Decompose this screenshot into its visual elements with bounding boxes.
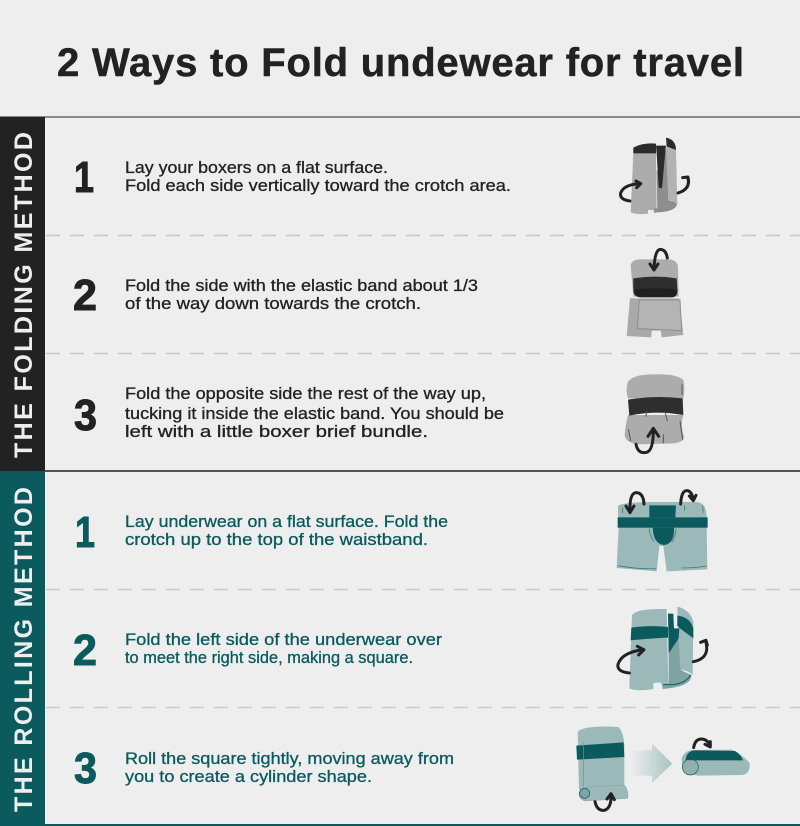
icon: rolling step 3 roll into a cylinder (576, 727, 750, 810)
folding step 2 text: of the way down towards the crotch. (125, 295, 421, 313)
rolling step 3 number: 3 (74, 744, 97, 793)
rolling step 1 text: crotch up to the top of the waistband. (125, 531, 428, 549)
folding step 3 text: left with a little boxer brief bundle. (125, 423, 428, 441)
rolling step 2 text: Fold the left side of the underwear over (125, 631, 443, 649)
folding step 3 text: Fold the opposite side the rest of the way up, (125, 385, 486, 403)
folding step 1 text: Lay your boxers on a flat surface. (125, 159, 388, 177)
folding step 2 text: Fold the side with the elastic band about 1/3 (125, 277, 478, 295)
icon: rolling step 1 underwear laid flat (617, 491, 708, 571)
folding step 3 number: 3 (74, 391, 97, 440)
title: 2 Ways to Fold undewear for travel (57, 41, 744, 85)
icon: folding step 2 waistband folded down (627, 249, 683, 337)
icon: folding step 1 boxers with side folds (621, 138, 689, 214)
folding step 2 number: 2 (73, 271, 97, 320)
rolling step 2 text: to meet the right side, making a square. (125, 649, 413, 667)
folding step 1 text: Fold each side vertically toward the crotch area. (125, 177, 511, 195)
folding step 1 number: 1 (74, 153, 94, 202)
rolling step 1 text: Lay underwear on a flat surface. Fold the (125, 513, 448, 531)
rolling step 3 text: you to create a cylinder shape. (125, 768, 372, 786)
rolling step 2 number: 2 (73, 626, 97, 675)
panel: the folding method side label: THE FOLDING METHOD (10, 132, 38, 458)
icon: folding step 3 finished bundle (625, 374, 684, 453)
panel: the folding method side label (0, 117, 45, 471)
panel: the rolling method side label (0, 471, 45, 826)
icon: rolling step 2 folded into a square (618, 607, 707, 690)
rolling step 1 number: 1 (75, 508, 95, 557)
panel: the rolling method side label: THE ROLLING METHOD (10, 487, 38, 812)
folding step 3 text: tucking it inside the elastic band. You should be (125, 405, 504, 423)
rolling step 3 text: Roll the square tightly, moving away from (125, 750, 454, 768)
